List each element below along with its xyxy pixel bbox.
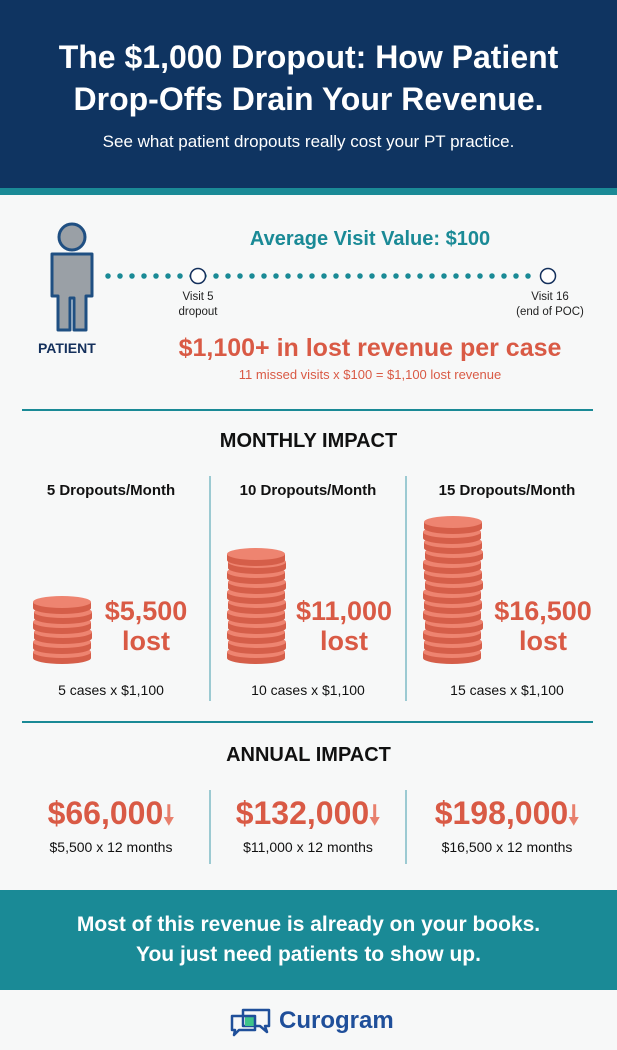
subtitle: See what patient dropouts really cost your PT practice.: [103, 132, 514, 151]
amount: [494, 596, 592, 656]
logo: [230, 1007, 394, 1036]
amount: lost: [320, 626, 368, 656]
wordmark: Curogram: [279, 1007, 394, 1034]
label: visit 5: dropout: [178, 306, 218, 318]
column heading: 10 Dropouts/Month: [240, 482, 376, 499]
amount: $16,500: [494, 596, 592, 626]
timeline: [105, 268, 556, 284]
icon: chat bubbles: [230, 1008, 270, 1036]
annual: 132000: $11,000 x 12 months: [243, 839, 373, 855]
banner: Most of this revenue is already on your books.: [77, 913, 540, 936]
label: visit 5: [178, 291, 218, 318]
header: [0, 0, 617, 195]
title: The $1,000 Dropout: How Patient: [59, 39, 558, 75]
formula: 15 cases x $1,100: [450, 682, 564, 698]
amount: lost: [519, 626, 567, 656]
label: visit 5: Visit 5: [182, 291, 214, 303]
annual: 66000: [48, 795, 174, 855]
heading: monthly impact: MONTHLY IMPACT: [220, 430, 397, 452]
title: [59, 39, 558, 117]
banner: [0, 890, 617, 990]
amount: $11,000: [296, 596, 392, 626]
coin stack: [423, 516, 483, 664]
panel: 5 dropouts: [33, 482, 187, 698]
annual: 198000: $198,000🠗: [435, 795, 579, 831]
amount: [296, 596, 392, 656]
label: visit 16: Visit 16: [531, 291, 569, 303]
label: patient: PATIENT: [38, 340, 96, 356]
amount: $5,500: [105, 596, 187, 626]
lost revenue per case: $1,100+ in lost revenue per case: [179, 334, 561, 362]
column heading: 5 Dropouts/Month: [47, 482, 175, 499]
annual: 66000: $5,500 x 12 months: [50, 839, 172, 855]
formula: 5 cases x $1,100: [58, 682, 164, 698]
annual: 198000: $16,500 x 12 months: [442, 839, 572, 855]
label: visit 16: (end of POC): [516, 306, 584, 318]
calc text: 11 missed visits x $100 = $1,100 lost revenue: [239, 367, 501, 382]
icon: patient: [50, 222, 94, 332]
heading: average visit value: Average Visit Value: $100: [250, 228, 490, 250]
coin stack: [227, 548, 286, 664]
panel: 10 dropouts: [227, 482, 392, 698]
label: visit 16: [516, 291, 584, 318]
formula: 10 cases x $1,100: [251, 682, 365, 698]
annual: 198000: [435, 795, 579, 855]
annual: 132000: $132,000🠗: [236, 795, 380, 831]
column heading: 15 Dropouts/Month: [439, 482, 575, 499]
heading: annual impact: ANNUAL IMPACT: [226, 744, 391, 766]
coin stack: [33, 596, 92, 664]
banner: You just need patients to show up.: [136, 943, 481, 966]
amount: lost: [122, 626, 170, 656]
amount: [105, 596, 187, 656]
annual: 132000: [236, 795, 380, 855]
annual: 66000: $66,000🠗: [48, 795, 174, 831]
panel: 15 dropouts: [423, 482, 592, 698]
title: Drop-Offs Drain Your Revenue.: [74, 81, 544, 117]
